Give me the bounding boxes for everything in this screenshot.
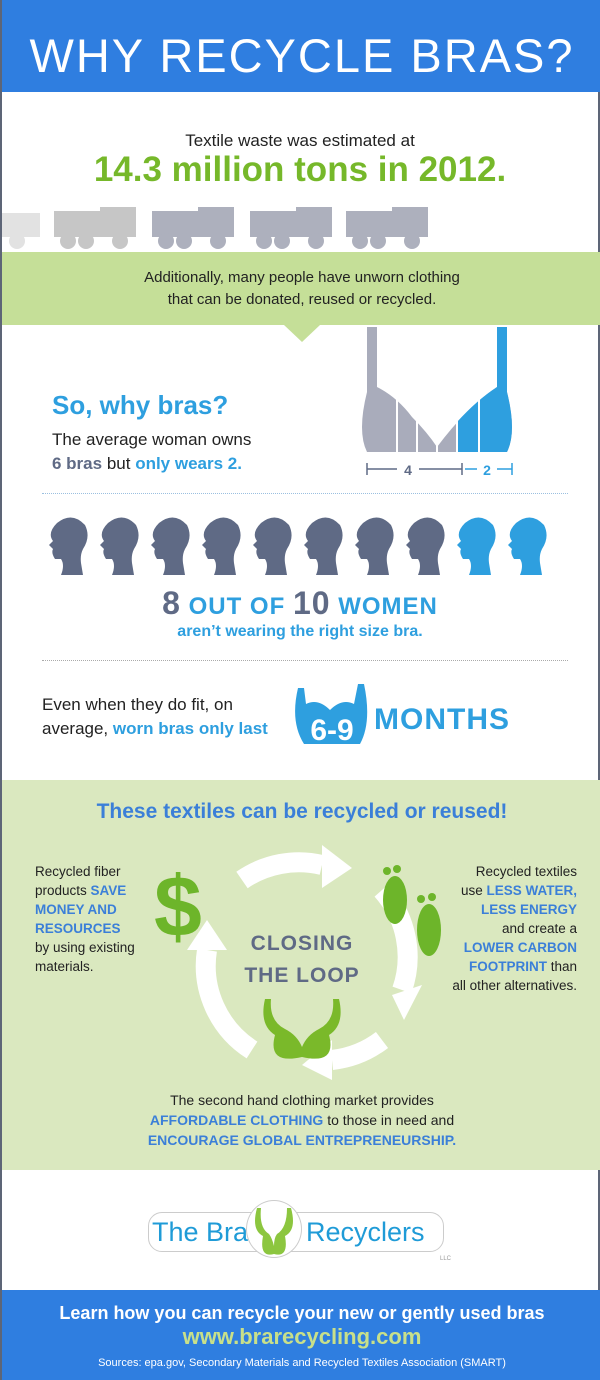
- text: worn bras last: [42, 695, 268, 738]
- footer banner: [2, 1290, 600, 1380]
- icon: dollar: $: [154, 859, 202, 955]
- label: closing the loop: THE LOOP: [244, 964, 360, 987]
- logo: Recyclers: [306, 1217, 425, 1247]
- text: less water: [452, 864, 577, 993]
- text: save money: by using existing: [35, 940, 135, 955]
- text: less water: Recycled textiles: [476, 864, 577, 879]
- green band with arrow: [2, 252, 600, 342]
- logo: LLC: [440, 1256, 451, 1262]
- bra graphic 6 segments: 4: [404, 462, 412, 478]
- text: average woman: [52, 430, 251, 473]
- text: textile waste: Textile waste was estimated at: [185, 131, 415, 150]
- text: save money: Recycled fiber: [35, 864, 121, 879]
- text: less water: and create a: [502, 921, 577, 936]
- heads row: [49, 518, 547, 575]
- text: worn bras last: average, worn bras only last: [42, 719, 268, 738]
- text: save money: materials.: [35, 959, 94, 974]
- text: less water: FOOTPRINT than: [469, 959, 577, 974]
- text: unworn clothing: that can be donated, reused or recycled.: [168, 291, 436, 308]
- text: save money: MONEY AND: [35, 902, 117, 917]
- text: second hand market: [148, 1092, 456, 1148]
- green panel: closing the loop: [2, 780, 600, 1170]
- icon: 6-9 bra: [295, 684, 368, 747]
- text: unworn clothing: [144, 269, 460, 308]
- text: less water: LOWER CARBON: [464, 940, 577, 955]
- label: closing the loop: CLOSING: [251, 932, 353, 955]
- months text: MONTHS: [374, 703, 510, 736]
- icon: bra: [263, 999, 341, 1059]
- text: average woman: 6 bras but only wears 2.: [52, 454, 242, 473]
- heading: so why bras: So, why bras?: [52, 390, 228, 420]
- header banner: [2, 0, 600, 92]
- heading: recycled or reused: These textiles can be recycled or reused!: [97, 800, 507, 823]
- icon: 6-9 bra: 6-9: [310, 714, 354, 747]
- text: save money: [35, 864, 135, 974]
- text: second hand market: AFFORDABLE CLOTHING to those in need and: [150, 1112, 454, 1128]
- text: second hand market: ENCOURAGE GLOBAL ENTREPRENEURSHIP.: [148, 1132, 456, 1148]
- sources: Sources: epa.gov, Secondary Materials and Recycled Textiles Association (SMART): [98, 1357, 506, 1369]
- text: wrong size: aren’t wearing the right size bra.: [177, 623, 423, 640]
- icon: footprints: [383, 865, 441, 956]
- bra graphic 6 segments: [362, 327, 513, 478]
- stat: 8 out of 10 women: 8 OUT OF 10 WOMEN: [162, 585, 438, 621]
- label: closing the loop: [244, 932, 360, 987]
- stat: 14.3 million tons: 14.3 million tons in 2012.: [94, 150, 506, 189]
- text: save money: products SAVE: [35, 883, 126, 898]
- text: average woman: The average woman owns: [52, 430, 251, 449]
- footer url: www.brarecycling.com: [183, 1324, 421, 1349]
- text: second hand market: The second hand clothing market provides: [170, 1092, 434, 1108]
- text: less water: LESS ENERGY: [481, 902, 577, 917]
- title: WHY RECYCLE BRAS?: [29, 29, 575, 82]
- trucks: [2, 207, 428, 249]
- bra graphic 6 segments: 2: [483, 462, 491, 478]
- logo: [148, 1200, 451, 1262]
- loop circle arrows: [187, 845, 422, 1080]
- text: save money: RESOURCES: [35, 921, 121, 936]
- text: worn bras last: Even when they do fit, on: [42, 695, 233, 714]
- footer call to action: Learn how you can recycle your new or gently used bras: [59, 1303, 545, 1323]
- text: less water: use LESS WATER,: [461, 883, 577, 898]
- text: less water: all other alternatives.: [452, 978, 577, 993]
- text: unworn clothing: Additionally, many people have unworn clothing: [144, 269, 460, 286]
- logo: The Bra: [152, 1217, 248, 1247]
